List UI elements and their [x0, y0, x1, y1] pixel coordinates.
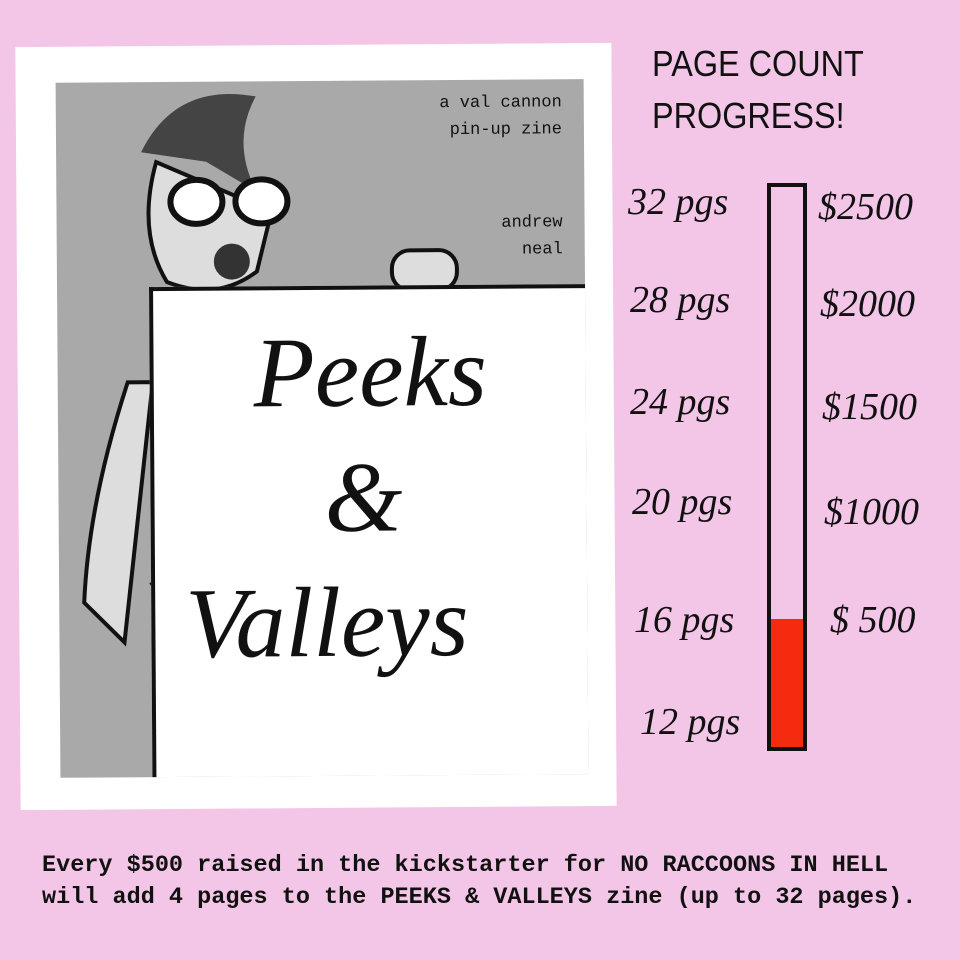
sign title: [185, 316, 487, 679]
sign title: Peeks: [253, 316, 487, 428]
text: $2000: [820, 283, 915, 325]
cover text: subtitle: pin-up zine: [450, 120, 562, 140]
progress fill: [771, 619, 803, 747]
text: $1000: [824, 491, 919, 533]
text: 20 pgs: [632, 481, 732, 523]
title: page count progress: PAGE COUNT: [652, 43, 864, 84]
sign title: &: [324, 441, 403, 553]
caption: [42, 852, 916, 911]
text: 16 pgs: [634, 599, 734, 641]
text: 32 pgs: [628, 181, 728, 223]
cover text: subtitle: [439, 93, 562, 140]
cover text: author: [501, 213, 563, 260]
text: 24 pgs: [630, 381, 730, 423]
text: $ 500: [830, 599, 916, 641]
cover gray art area: [56, 79, 588, 778]
text: $2500: [818, 186, 913, 228]
text: $1500: [822, 386, 917, 428]
title: page count progress: [652, 43, 864, 136]
text: 28 pgs: [630, 279, 730, 321]
chart: thermometer: [767, 183, 807, 751]
illustration: character: [82, 94, 459, 646]
cover text: author: neal: [522, 240, 563, 260]
cover text: subtitle: a val cannon: [439, 93, 562, 113]
text: 12 pgs: [640, 701, 740, 743]
title: page count progress: PROGRESS!: [652, 95, 845, 136]
sign title: Valleys: [185, 566, 469, 679]
labels: dollars: [818, 186, 919, 641]
labels: pages: [628, 181, 740, 743]
caption: will add 4 pages to the PEEKS & VALLEYS zine (up to 32 pages).: [42, 884, 916, 911]
caption: Every $500 raised in the kickstarter for NO RACCOONS IN HELL: [42, 852, 888, 879]
panel: zine cover card: [15, 43, 617, 810]
sign board: [149, 284, 588, 777]
cover text: author: andrew: [501, 213, 563, 233]
